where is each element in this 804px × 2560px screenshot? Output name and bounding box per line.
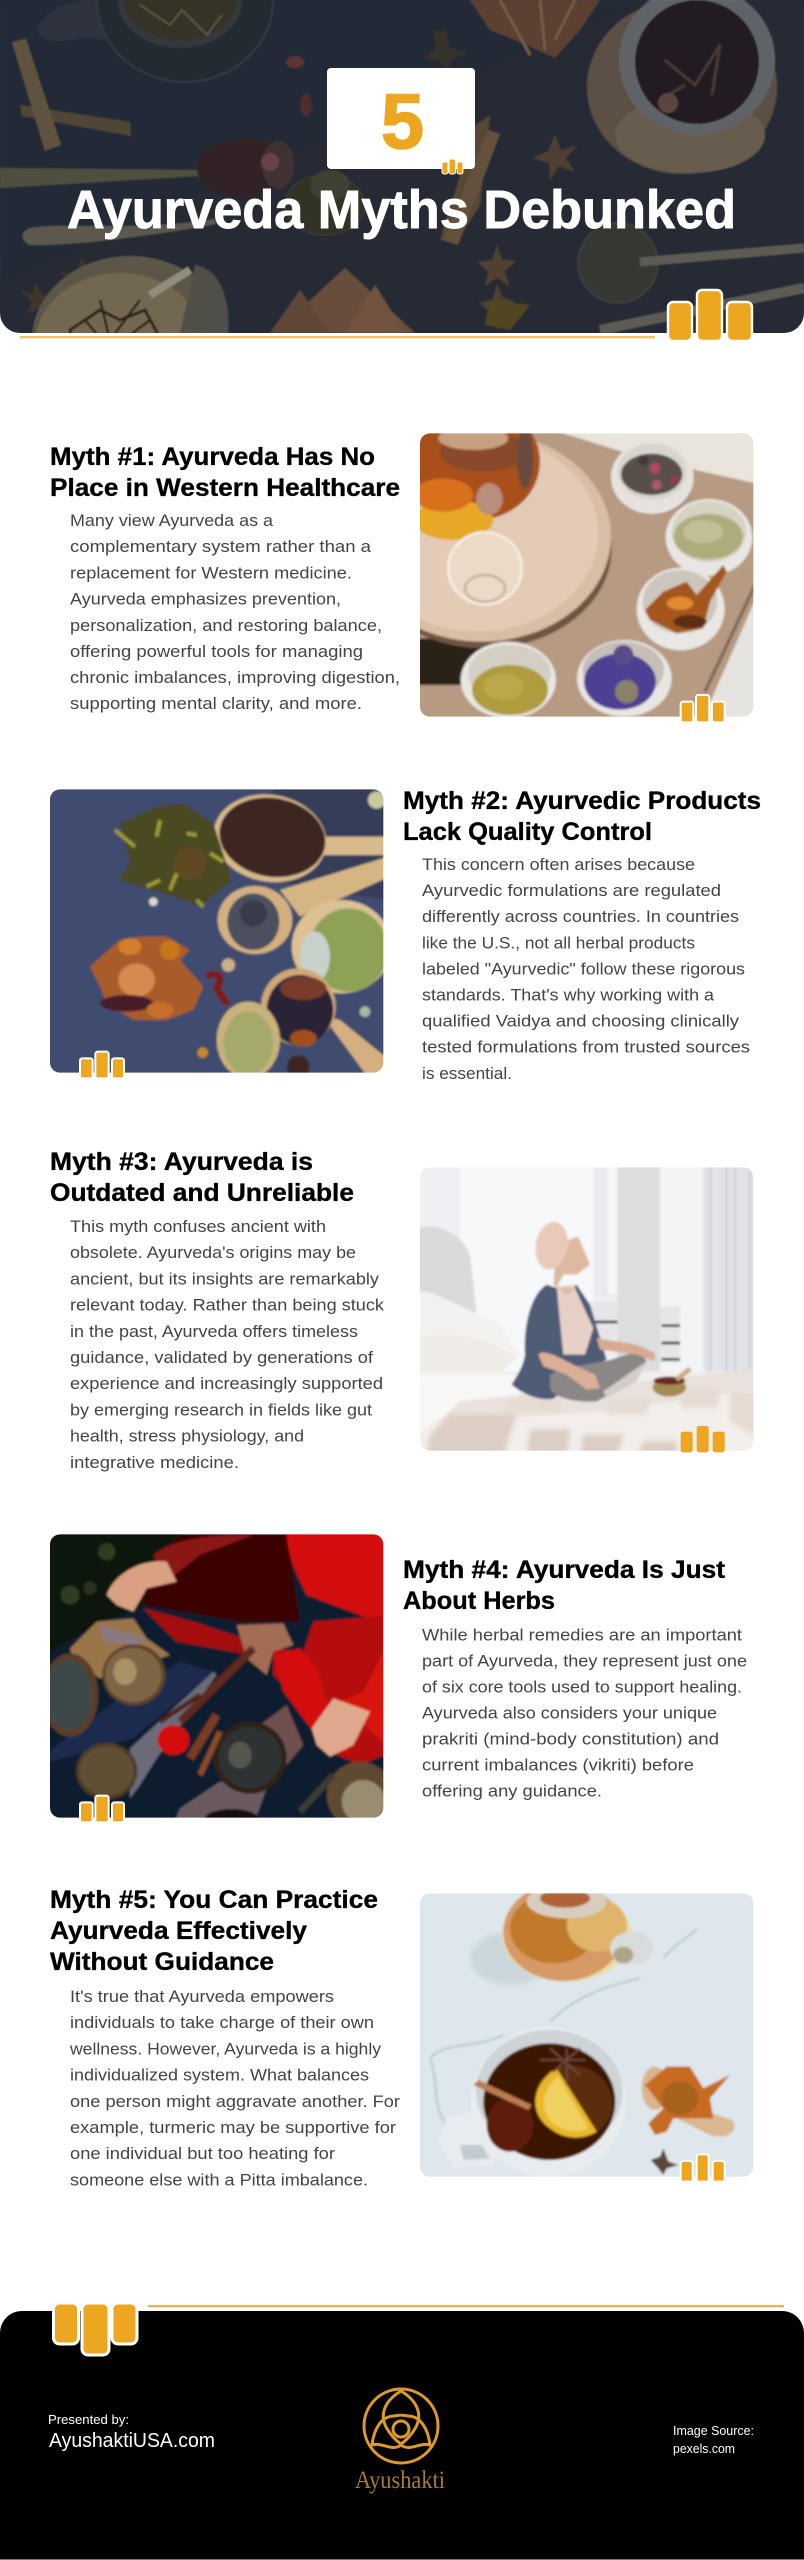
myth 2 body text: qualified Vaidya and choosing clinically [422,1012,740,1031]
myth 2 heading: Lack Quality Control [403,818,652,846]
myth 3 heading [50,1148,354,1207]
footer gold rule [148,2305,784,2307]
myth 3 body text: by emerging research in fields like gut [70,1400,372,1419]
myth 2 heading [403,787,761,846]
logo: Ayushakti [355,2389,445,2494]
bar icon [80,1796,124,1822]
myth 3 body text: ancient, but its insights are remarkably [70,1269,380,1288]
small bar icon [442,159,463,174]
myth 1 heading: Myth #1: Ayurveda Has No [50,443,375,471]
presented by text: Presented by: [48,2412,129,2427]
photo: spices on wooden spoons [40,780,393,1080]
myth 1 body text: offering powerful tools for managing [70,642,363,661]
photo: singing bowls and red clothing [50,1534,384,1822]
hero photo: spices on slate [0,0,804,333]
panel: myth 1 [52,433,754,722]
myth 3 body text: in the past, Ayurveda offers timeless [70,1322,358,1341]
image source text: pexels.com [673,2441,735,2456]
myth 3 body text: experience and increasingly supported [70,1374,383,1393]
bar icon [681,2154,725,2182]
myth 4 body text: While herbal remedies are an important [422,1626,742,1644]
panel: myth 3 [50,1148,763,1472]
myth 5 heading: Ayurveda Effectively [50,1917,307,1945]
myth 1 body text: replacement for Western medicine. [70,563,352,582]
myth 1 heading: Place in Western Healthcare [50,474,400,502]
main title: Ayurveda Myths Debunked [67,180,736,240]
panel: myth 2 [40,780,761,1083]
myth 3 heading: Myth #3: Ayurveda is [50,1148,313,1176]
myth 5 heading [50,1886,378,1976]
myth 2 body text: like the U.S., not all herbal products [422,933,695,952]
myth 1 body text: personalization, and restoring balance, [70,616,382,635]
myth 2 body text: This concern often arises because [422,855,695,874]
myth 4 body text: current imbalances (vikriti) before [422,1756,694,1774]
myth 5 body text: individuals to take charge of their own [70,2013,374,2032]
myth 2 body text: standards. That's why working with a [422,986,715,1004]
myth 2 body text: tested formulations from trusted sources [422,1038,750,1057]
myth 4 heading [403,1556,726,1615]
myth 1 body text: complementary system rather than a [70,537,372,556]
photo: tea cup on marble [420,1893,754,2181]
footer panel [0,2303,804,2560]
myth 2 body text: differently across countries. In countries [422,907,739,926]
myth 1 heading [50,443,400,502]
myth 5 body text: example, turmeric may be supportive for [70,2118,396,2137]
myth 3 body text [70,1217,385,1472]
myth 4 body text [422,1626,747,1800]
myth 1 body text: supporting mental clarity, and more. [70,694,362,713]
myth 5 body text: someone else with a Pitta imbalance. [70,2170,368,2189]
bar icon [681,1426,725,1452]
number card [327,68,475,174]
myth 4 heading: Myth #4: Ayurveda Is Just [403,1556,726,1584]
myth 5 body text: It's true that Ayurveda empowers [70,1987,334,2006]
myth 5 body text [69,1987,400,2189]
footer bar icon [54,2303,137,2355]
myth 2 body text: Ayurvedic formulations are regulated [422,881,721,900]
photo: herbs in white bowls [420,433,754,722]
myth 5 body text: one person might aggravate another. For [70,2092,400,2111]
wordmark: Ayushakti [355,2467,445,2494]
photo: woman meditating on bed [420,1167,754,1452]
myth 4 body text: Ayurveda also considers your unique [422,1704,717,1722]
hero gold rule [20,336,655,338]
myth 2 heading: Myth #2: Ayurvedic Products [403,787,761,815]
myth 3 body text: health, stress physiology, and [70,1427,304,1446]
myth 5 heading: Myth #5: You Can Practice [50,1886,378,1914]
hero bar icon [668,290,752,341]
myth 4 body text: offering any guidance. [422,1782,602,1800]
myth 1 body text: chronic imbalances, improving digestion, [70,668,400,687]
image source text [673,2423,754,2456]
myth 5 body text: wellness. However, Ayurveda is a highly [69,2039,382,2058]
myth 3 body text: integrative medicine. [70,1453,239,1472]
myth 3 body text: obsolete. Ayurveda's origins may be [70,1243,356,1262]
myth 5 body text: individualized system. What balances [70,2066,369,2085]
myth 3 heading: Outdated and Unreliable [50,1179,354,1207]
presented by text [48,2412,215,2452]
myth 5 heading: Without Guidance [50,1948,274,1976]
image source text: Image Source: [673,2423,754,2438]
myth 3 body text: relevant today. Rather than being stuck [70,1296,385,1315]
myth 3 body text: This myth confuses ancient with [70,1217,326,1236]
myth 1 body text: Ayurveda emphasizes prevention, [70,590,341,609]
myth 1 body text [70,511,400,713]
myth 4 body text: part of Ayurveda, they represent just one [422,1652,747,1670]
myth 4 body text: prakriti (mind-body constitution) and [422,1730,719,1748]
myth 4 heading: About Herbs [403,1587,555,1615]
myth 1 body text: Many view Ayurveda as a [70,511,274,530]
bar icon [80,1052,124,1078]
myth 5 body text: one individual but too heating for [70,2144,335,2163]
myth 4 body text: of six core tools used to support healing. [422,1678,742,1696]
presented by text: AyushaktiUSA.com [49,2429,215,2452]
myth 2 body text: is essential. [422,1064,512,1083]
myth 2 body text [422,855,750,1083]
hero banner [0,0,804,340]
myth 2 body text: labeled "Ayurvedic" follow these rigorous [422,959,745,978]
panel: myth 4 [40,1525,747,1828]
number 5: 5 [381,77,424,165]
panel: myth 5 [50,1882,763,2189]
bar icon [681,695,725,722]
myth 3 body text: guidance, validated by generations of [70,1348,373,1367]
